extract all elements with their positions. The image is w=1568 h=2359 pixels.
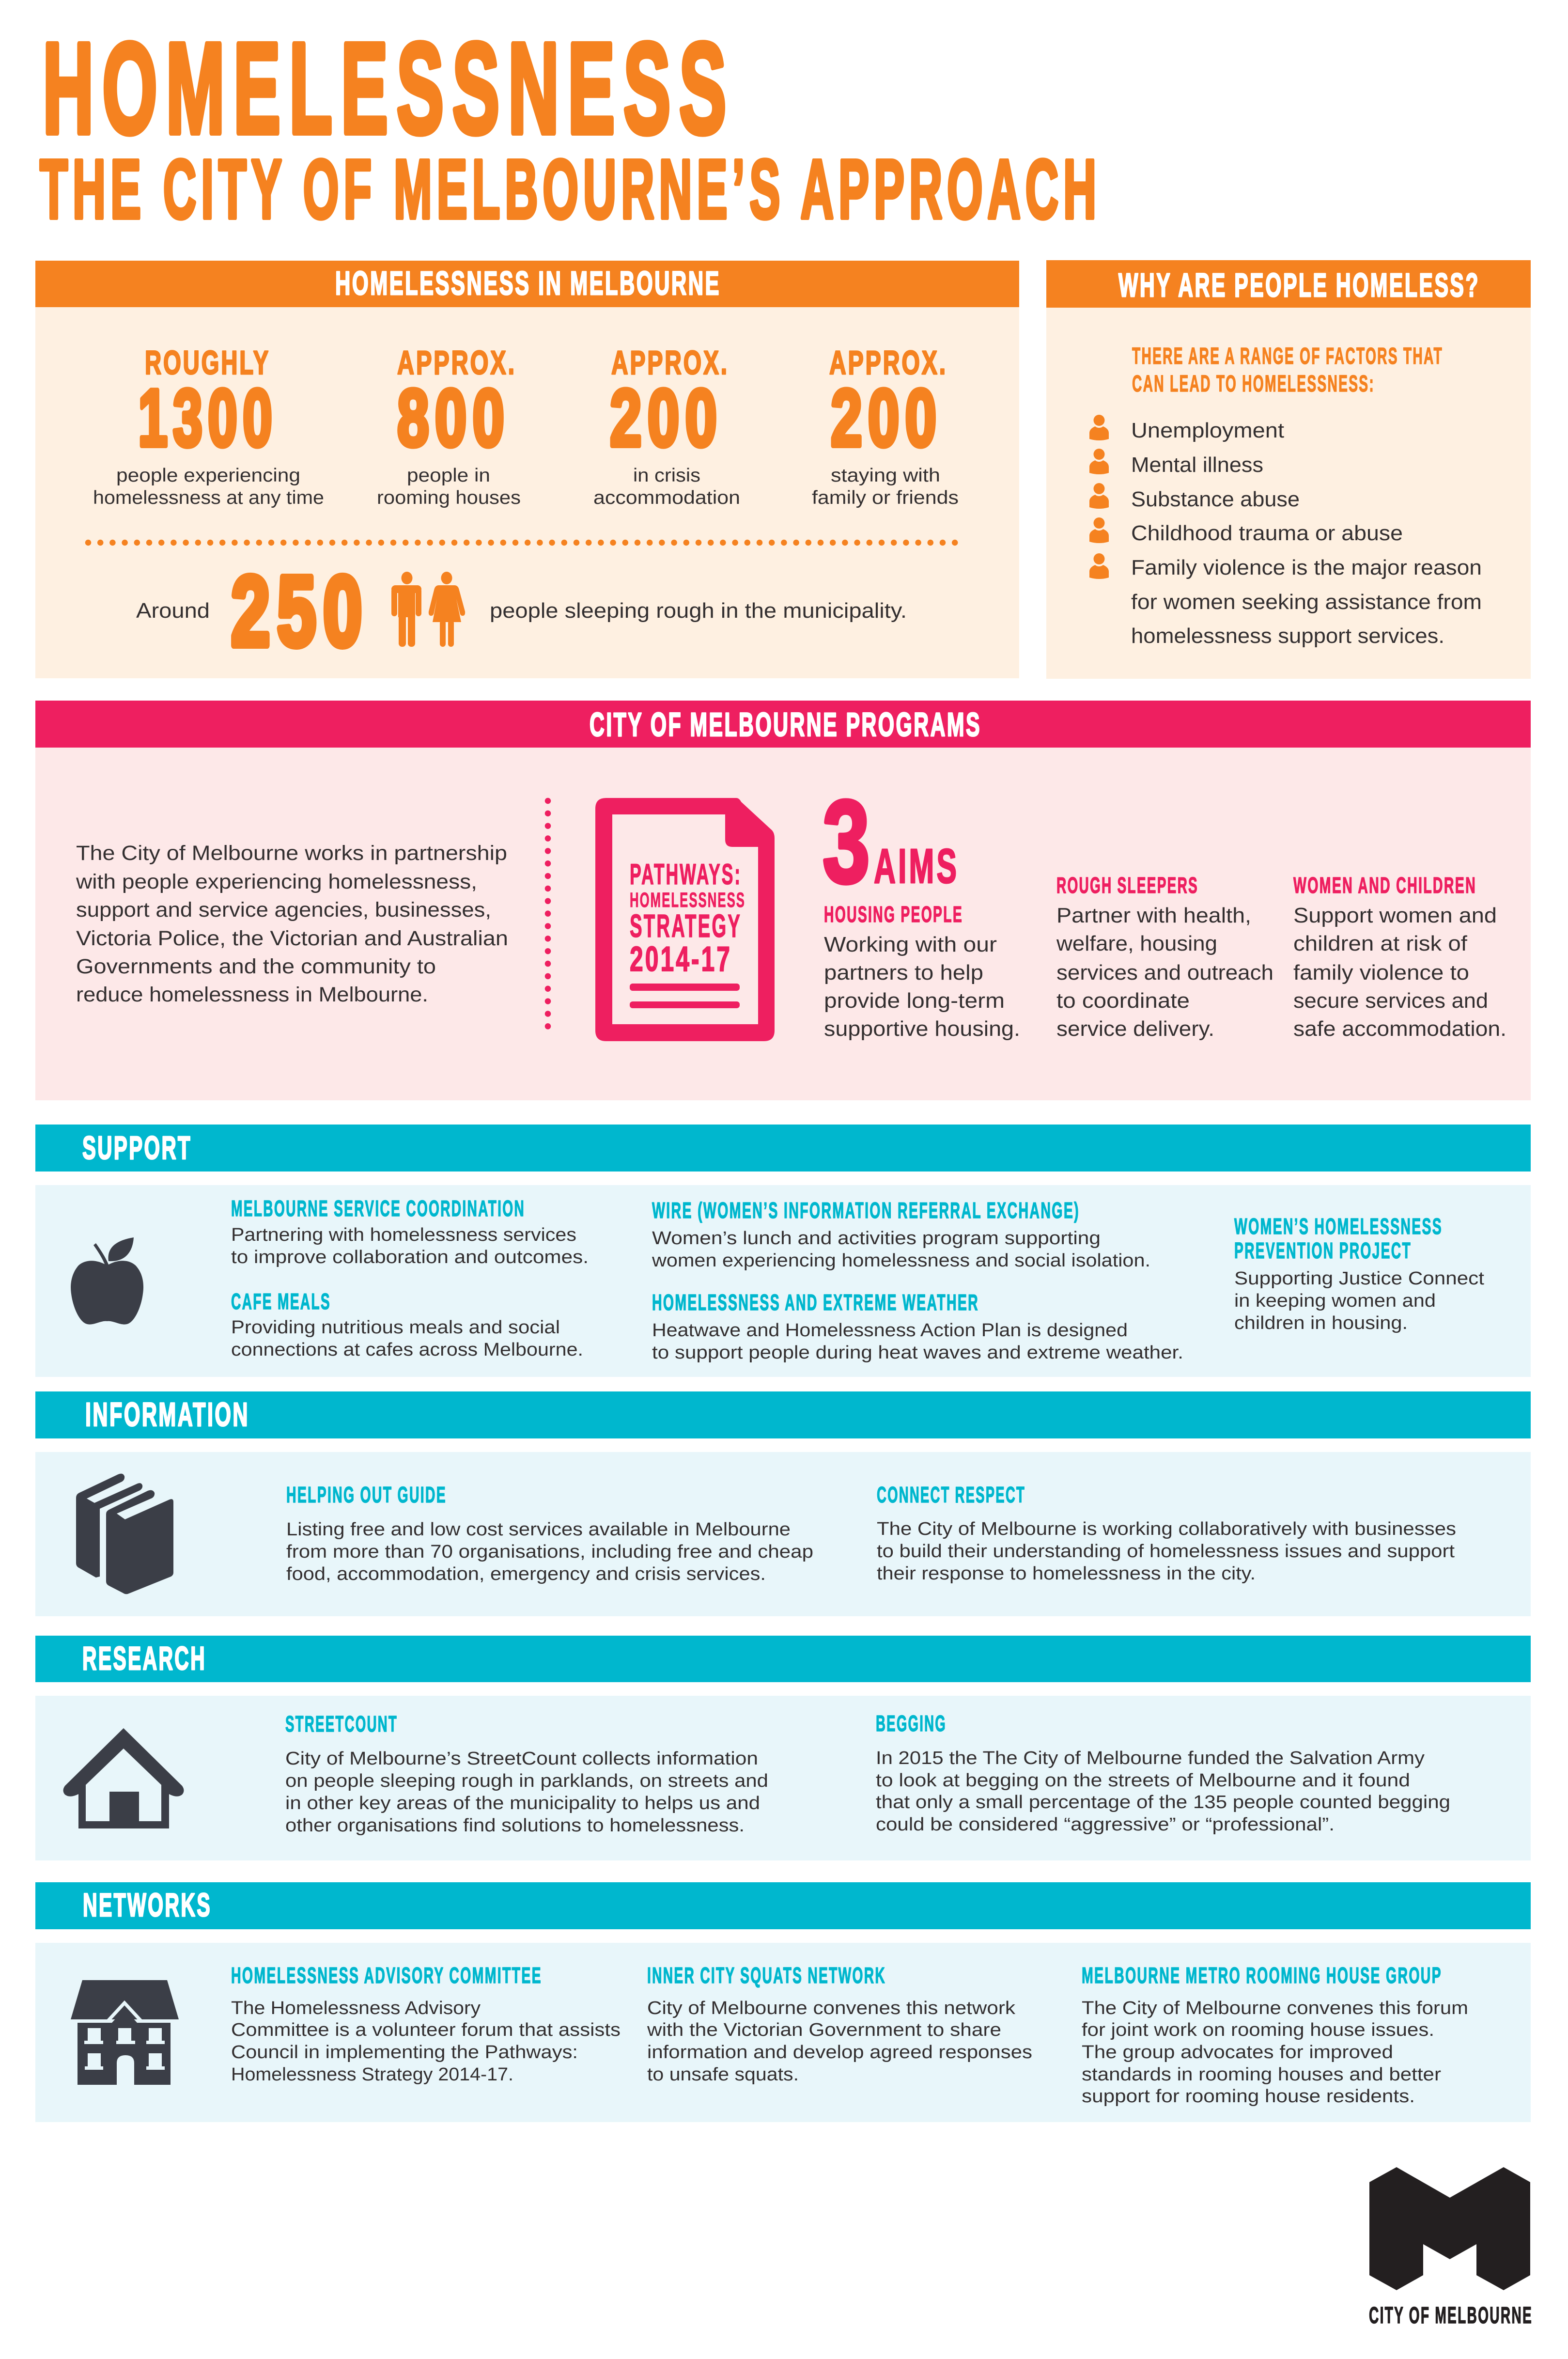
icon: person bullet 1 <box>1089 415 1109 440</box>
item: begging: to look at begging on the streets of Melbourne and it found <box>876 1770 1410 1791</box>
stat: roughly 1300: 1300 <box>138 373 278 463</box>
heading: city of Melbourne programs: CITY OF MELBOURNE PROGRAMS <box>590 706 981 743</box>
stat: roughly 1300 <box>93 344 324 508</box>
panel: information <box>35 1452 1531 1616</box>
stat: approx 800: people in <box>407 465 490 486</box>
stat: approx 200 family: APPROX. <box>829 344 947 381</box>
item: streetcount: other organisations find solutions to homelessness. <box>285 1815 745 1836</box>
stat: roughly 1300: ROUGHLY <box>145 344 270 381</box>
item: Melbourne service coordination <box>231 1196 589 1267</box>
stat: approx 200 family <box>812 344 959 508</box>
item: streetcount <box>285 1711 768 1836</box>
stat: approx 800: 800 <box>397 373 510 463</box>
item: Melbourne metro rooming house group: standards in rooming houses and better <box>1082 2064 1441 2085</box>
item: women's homelessness prevention project: PREVENTION PROJECT <box>1234 1238 1412 1263</box>
aim: women and children: family violence to <box>1293 961 1469 984</box>
item: begging: BEGGING <box>876 1711 947 1736</box>
list of factors: homelessness support services. <box>1131 624 1444 648</box>
list of factors: Mental illness <box>1131 453 1263 477</box>
icon: strategy document: STRATEGY <box>630 908 742 944</box>
section bar: support <box>35 1125 1531 1172</box>
item: homelessness and extreme weather: Heatwave and Homelessness Action Plan is designed <box>652 1320 1128 1341</box>
item: WIRE: Women’s lunch and activities program supporting <box>652 1228 1101 1249</box>
icon: strategy document: PATHWAYS: <box>630 858 742 890</box>
item: inner city squats network: City of Melbourne convenes this network <box>647 1998 1016 2018</box>
item: streetcount: STREETCOUNT <box>285 1711 398 1736</box>
heading: 3 aims <box>823 776 959 907</box>
heading: homelessness in Melbourne <box>35 261 1019 307</box>
item: cafe meals: Providing nutritious meals and social <box>231 1317 560 1338</box>
item: Melbourne metro rooming house group <box>1082 1963 1468 2107</box>
item: cafe meals: CAFE MEALS <box>231 1289 331 1314</box>
aim: women and children: secure services and <box>1293 989 1488 1013</box>
intro paragraph: with people experiencing homelessness, <box>76 870 477 893</box>
item: Melbourne metro rooming house group: The City of Melbourne convenes this forum <box>1082 1998 1468 2018</box>
section bar: information: INFORMATION <box>85 1396 249 1433</box>
item: WIRE: women experiencing homelessness and social isolation. <box>652 1250 1150 1271</box>
aim: rough sleepers: to coordinate <box>1056 989 1190 1013</box>
aim: rough sleepers: services and outreach <box>1056 961 1273 984</box>
item: cafe meals: connections at cafes across Melbourne. <box>231 1340 583 1360</box>
stat: approx 200 crisis: APPROX. <box>611 344 729 381</box>
item: streetcount: City of Melbourne’s StreetCount collects information <box>285 1749 758 1769</box>
stat: around 250 sleeping rough: people sleeping rough in the municipality. <box>490 599 907 623</box>
stat: roughly 1300: people experiencing <box>116 465 300 486</box>
icon: apple <box>71 1237 143 1325</box>
item: homelessness advisory committee <box>231 1963 621 2085</box>
section bar: support: SUPPORT <box>82 1130 192 1166</box>
panel: city of Melbourne programs <box>35 701 1531 1100</box>
title <box>40 16 1101 236</box>
list of factors: Childhood trauma or abuse <box>1131 521 1403 545</box>
item: connect respect: to build their understanding of homelessness issues and support <box>877 1541 1455 1562</box>
item: inner city squats network <box>647 1963 1032 2085</box>
aim: housing people: HOUSING PEOPLE <box>824 902 963 927</box>
item: homelessness and extreme weather: to support people during heat waves and extreme weather. <box>652 1343 1183 1363</box>
icon: woman <box>429 572 465 647</box>
stat: around 250 sleeping rough: 250 <box>231 556 369 667</box>
aim: housing people: provide long-term <box>824 989 1005 1013</box>
section bar: research: RESEARCH <box>82 1640 206 1677</box>
item: connect respect: CONNECT RESPECT <box>877 1482 1025 1507</box>
item: women's homelessness prevention project <box>1234 1214 1484 1333</box>
panel: why are people homeless <box>1046 260 1531 679</box>
stat: roughly 1300: homelessness at any time <box>93 487 324 508</box>
intro paragraph: Victoria Police, the Victorian and Australian <box>76 927 508 950</box>
section bar: networks <box>35 1882 1531 1929</box>
intro paragraph <box>76 842 508 1006</box>
stat: around 250 sleeping rough <box>136 556 907 667</box>
item: helping out guide: food, accommodation, emergency and crisis services. <box>286 1564 766 1584</box>
list of factors: Unemployment <box>1131 419 1284 442</box>
item: Melbourne service coordination: MELBOURNE SERVICE COORDINATION <box>231 1196 525 1221</box>
section bar: information <box>35 1391 1531 1438</box>
section bar: networks: NETWORKS <box>83 1887 212 1923</box>
panel: support <box>35 1185 1531 1377</box>
aim: women and children <box>1293 873 1506 1041</box>
aim: housing people: partners to help <box>824 961 983 984</box>
aim: rough sleepers: service delivery. <box>1056 1017 1214 1041</box>
item: inner city squats network: to unsafe squats. <box>647 2064 799 2085</box>
item: homelessness advisory committee: Homelessness Strategy 2014-17. <box>231 2064 513 2085</box>
aim: women and children: safe accommodation. <box>1293 1017 1506 1041</box>
icon: strategy document: 2014-17 <box>630 940 732 979</box>
stat: approx 200 crisis: 200 <box>610 373 723 463</box>
intro paragraph: Governments and the community to <box>76 955 436 978</box>
item: women's homelessness prevention project: children in housing. <box>1234 1313 1408 1333</box>
item: begging: In 2015 the The City of Melbourne funded the Salvation Army <box>876 1748 1425 1768</box>
item: streetcount: on people sleeping rough in parklands, on streets and <box>285 1771 768 1791</box>
item: connect respect <box>877 1482 1456 1584</box>
item: WIRE: WIRE (WOMEN’S INFORMATION REFERRAL EXCHANGE) <box>652 1198 1080 1223</box>
aim: housing people: Working with our <box>824 933 997 956</box>
icon: rooming house building <box>71 1980 179 2085</box>
heading: why are people homeless <box>1046 260 1531 308</box>
panel: homelessness in Melbourne <box>35 261 1019 678</box>
intro text <box>1132 344 1443 397</box>
stat: approx 200 family: 200 <box>831 373 942 463</box>
panel: networks <box>35 1943 1531 2122</box>
item: WIRE <box>652 1198 1150 1271</box>
icon: person bullet 4 <box>1089 517 1109 543</box>
panel: research <box>35 1696 1531 1860</box>
item: connect respect: The City of Melbourne is working collaboratively with businesses <box>877 1519 1456 1539</box>
item: Melbourne service coordination: to improve collaboration and outcomes. <box>231 1247 589 1267</box>
icon: person bullet 5 <box>1089 553 1109 579</box>
stat: approx 200 crisis: in crisis <box>633 465 700 486</box>
item: homelessness advisory committee: The Homelessness Advisory <box>231 1998 481 2018</box>
list of factors: Substance abuse <box>1131 487 1300 511</box>
item: streetcount: in other key areas of the municipality to helps us and <box>285 1793 760 1813</box>
section bar: research <box>35 1636 1531 1682</box>
item: begging: could be considered “aggressive” or “professional”. <box>876 1814 1335 1835</box>
item: women's homelessness prevention project: WOMEN’S HOMELESSNESS <box>1234 1214 1443 1239</box>
item: Melbourne metro rooming house group: support for rooming house residents. <box>1082 2086 1415 2107</box>
list of factors: for women seeking assistance from <box>1131 590 1482 614</box>
item: cafe meals <box>231 1289 583 1360</box>
stat: approx 200 crisis: accommodation <box>593 487 740 508</box>
stat: approx 200 crisis <box>593 344 740 508</box>
heading: 3 aims: AIMS <box>874 839 959 893</box>
aim: women and children: children at risk of <box>1293 932 1468 955</box>
item: helping out guide: Listing free and low cost services available in Melbourne <box>286 1519 791 1540</box>
aim: rough sleepers <box>1056 873 1273 1041</box>
stat: approx 800 <box>377 344 521 508</box>
list of factors: Family violence is the major reason <box>1131 556 1482 579</box>
aim: rough sleepers: welfare, housing <box>1056 932 1217 955</box>
icon: strategy document <box>595 798 775 1041</box>
item: Melbourne service coordination: Partnering with homelessness services <box>231 1225 576 1245</box>
item: helping out guide: from more than 70 organisations, including free and cheap <box>286 1542 813 1562</box>
stat: approx 200 family: staying with <box>831 465 940 486</box>
stat: approx 800: APPROX. <box>397 344 516 381</box>
aim: housing people: supportive housing. <box>824 1017 1020 1041</box>
icon: person bullet 2 <box>1089 449 1109 474</box>
item: inner city squats network: information and develop agreed responses <box>647 2042 1032 2062</box>
item: inner city squats network: with the Victorian Government to share <box>647 2020 1001 2040</box>
item: homelessness advisory committee: Committee is a volunteer forum that assists <box>231 2020 621 2040</box>
intro paragraph: support and service agencies, businesses, <box>76 898 491 922</box>
item: Melbourne metro rooming house group: The group advocates for improved <box>1082 2042 1393 2062</box>
icon: man <box>391 572 421 647</box>
item: women's homelessness prevention project: in keeping women and <box>1234 1291 1436 1311</box>
title: HOMELESSNESS <box>43 16 735 160</box>
heading: city of Melbourne programs <box>35 701 1531 748</box>
stat: approx 200 family: family or friends <box>812 487 959 508</box>
aim: rough sleepers: ROUGH SLEEPERS <box>1056 873 1198 898</box>
intro paragraph: reduce homelessness in Melbourne. <box>76 983 428 1006</box>
item: homelessness and extreme weather: HOMELESSNESS AND EXTREME WEATHER <box>652 1290 979 1315</box>
intro text: CAN LEAD TO HOMELESSNESS: <box>1132 371 1375 397</box>
icon: books <box>76 1474 173 1594</box>
item: Melbourne metro rooming house group: for joint work on rooming house issues. <box>1082 2020 1434 2040</box>
item: helping out guide <box>286 1482 813 1584</box>
stat: approx 800: rooming houses <box>377 487 521 508</box>
heading: homelessness in Melbourne: HOMELESSNESS IN MELBOURNE <box>335 265 721 302</box>
icon: person bullet 3 <box>1089 483 1109 509</box>
item: connect respect: their response to homelessness in the city. <box>877 1563 1256 1584</box>
icon: house <box>63 1728 184 1828</box>
item: women's homelessness prevention project: Supporting Justice Connect <box>1234 1268 1484 1289</box>
list of factors <box>1131 419 1482 648</box>
item: begging <box>876 1711 1450 1835</box>
aim: women and children: Support women and <box>1293 904 1497 927</box>
item: inner city squats network: INNER CITY SQUATS NETWORK <box>647 1963 886 1988</box>
logo: City of Melbourne <box>1369 2167 1533 2328</box>
heading: 3 aims: 3 <box>823 776 870 907</box>
aim: housing people <box>824 902 1020 1041</box>
item: homelessness advisory committee: Council in implementing the Pathways: <box>231 2042 578 2062</box>
item: begging: that only a small percentage of the 135 people counted begging <box>876 1792 1450 1812</box>
item: helping out guide: HELPING OUT GUIDE <box>286 1482 447 1507</box>
aim: rough sleepers: Partner with health, <box>1056 904 1251 927</box>
icon: strategy document: HOMELESSNESS <box>630 889 745 912</box>
item: homelessness advisory committee: HOMELESSNESS ADVISORY COMMITTEE <box>231 1963 542 1988</box>
stat: around 250 sleeping rough: Around <box>136 599 210 623</box>
item: homelessness and extreme weather <box>652 1290 1183 1363</box>
intro paragraph: The City of Melbourne works in partnership <box>76 842 507 865</box>
